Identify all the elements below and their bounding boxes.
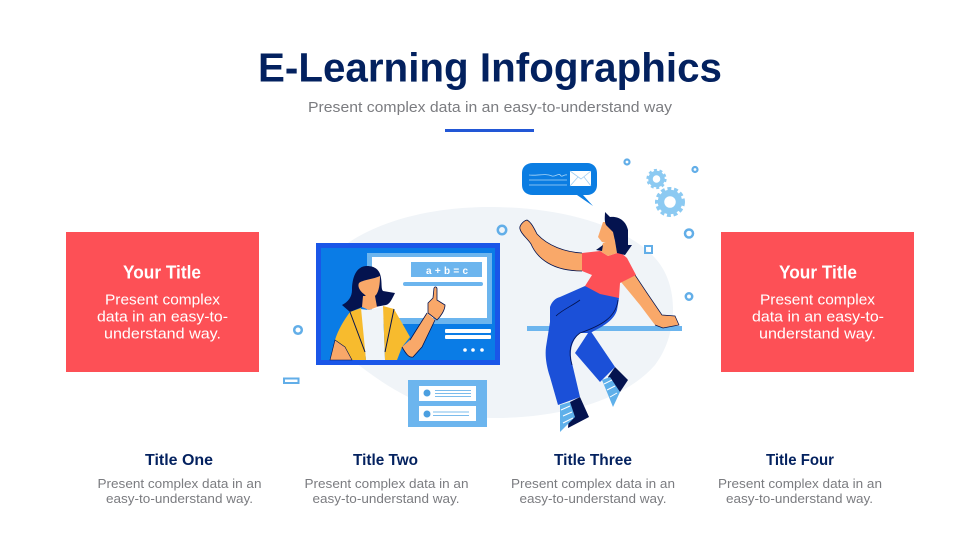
column: title three xyxy=(511,452,675,506)
hair xyxy=(596,212,632,255)
panel: left red callout: Present complex xyxy=(105,292,221,308)
column: title one: Present complex data in an xyxy=(98,476,262,491)
column: title four xyxy=(718,452,882,506)
panel: right red callout xyxy=(721,232,914,372)
illustration: speech bubble with envelope xyxy=(522,163,597,206)
panel: left red callout: Your Title xyxy=(123,262,201,282)
illustration: background blob xyxy=(345,207,673,418)
subtitle: Present complex data in an easy-to-understand way xyxy=(308,99,673,116)
teacher figure xyxy=(330,266,445,360)
jacket xyxy=(335,308,366,360)
panel: right red callout: data in an easy-to- xyxy=(752,308,884,326)
column: title three: easy-to-understand way. xyxy=(520,491,666,506)
back leg xyxy=(575,330,615,382)
face xyxy=(358,276,380,298)
title underline xyxy=(445,129,534,132)
neck xyxy=(600,240,617,256)
shelf xyxy=(527,326,682,331)
equation label: a + b = c xyxy=(426,266,468,277)
column: title two: easy-to-understand way. xyxy=(312,491,460,506)
title: E-Learning Infographics xyxy=(258,44,722,90)
equation label xyxy=(411,262,482,277)
icon: large gear xyxy=(656,188,684,216)
face xyxy=(598,222,616,243)
red shirt xyxy=(582,251,636,298)
column: title two: Title Two xyxy=(353,452,418,469)
column: title four: Present complex data in an xyxy=(718,476,882,491)
back shoe xyxy=(608,367,628,392)
panel: left red callout: understand way. xyxy=(104,326,221,342)
panel: right red callout: understand way. xyxy=(759,326,876,342)
illustration: checklist card xyxy=(408,380,487,427)
panel: right red callout: Present complex xyxy=(760,292,876,308)
panel: left red callout: data in an easy-to- xyxy=(97,308,228,326)
pointing hand xyxy=(428,287,445,320)
jeans xyxy=(546,286,619,405)
icon: decorative rings and squares xyxy=(284,160,698,383)
illustration: video screen with teacher xyxy=(316,243,500,365)
sleeve arm xyxy=(330,340,352,360)
column: title one: Title One xyxy=(145,452,213,469)
right arm xyxy=(621,275,679,328)
column: title four: Title Four xyxy=(766,452,834,469)
column: title one xyxy=(98,452,262,506)
white shirt xyxy=(360,307,385,360)
column: title two xyxy=(304,452,468,506)
hair xyxy=(342,266,395,312)
panel: right red callout: Your Title xyxy=(779,262,857,282)
left arm xyxy=(520,220,582,271)
raised arm xyxy=(402,313,435,357)
column: title two: Present complex data in an xyxy=(304,476,468,491)
panel: left red callout xyxy=(66,232,259,372)
column: title three: Present complex data in an xyxy=(511,476,675,491)
illustration: student sitting on a shelf xyxy=(520,212,682,432)
column: title one: easy-to-understand way. xyxy=(106,491,253,506)
icon: small gear xyxy=(648,170,666,188)
column: title four: easy-to-understand way. xyxy=(726,491,873,506)
front shoe xyxy=(568,397,589,428)
column: title three: Title Three xyxy=(554,452,632,469)
